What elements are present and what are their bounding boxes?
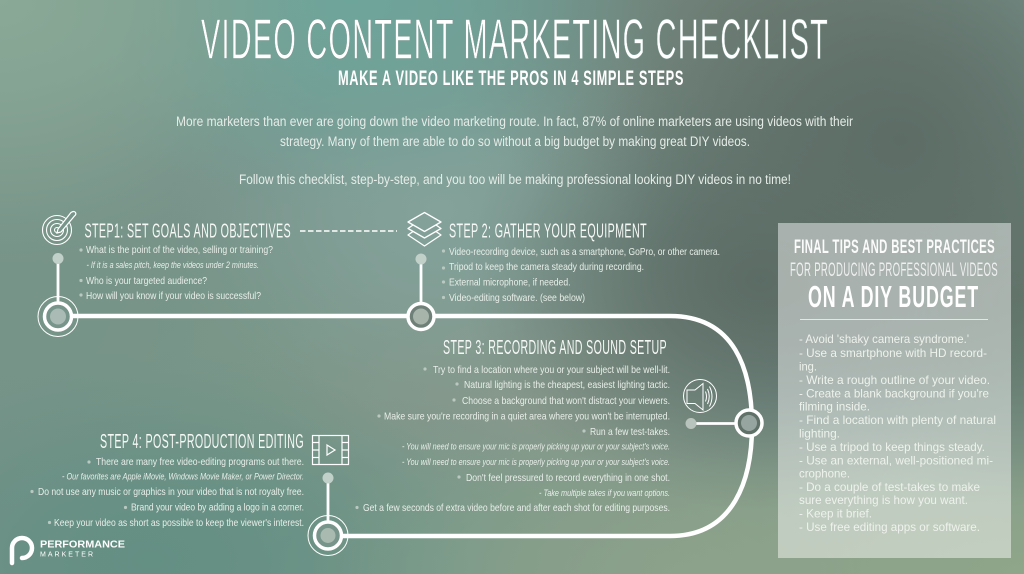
panel tips list: filming inside.: [799, 400, 870, 414]
intro text: Follow this checklist, step-by-step, and you too will be making professional looking DIY videos in no time!: [239, 172, 791, 187]
step 4 list: Do not use any music or graphics in your video that is not royalty free.: [38, 487, 304, 498]
step 1 list: [79, 245, 273, 302]
step 3 list: Try to find a location where you or your subject will be well-lit.: [433, 365, 670, 376]
intro text: strategy. Many of them are able to do so without a big budget by making great DIY videos.: [280, 134, 750, 149]
icon: target with pencil: [42, 212, 76, 244]
logo wordmark: [40, 538, 125, 558]
panel tips list: sure everything is how you want.: [799, 493, 968, 507]
panel tips list: - Do a couple of test-takes to make: [799, 480, 980, 494]
step 2 list: Video-recording device, such as a smartphone, GoPro, or other camera.: [449, 247, 720, 258]
panel tips list: crophone.: [799, 466, 850, 480]
step 1 list: What is the point of the video, selling or training?: [86, 245, 273, 256]
node: step 3: [686, 410, 762, 436]
intro text: More marketers than ever are going down the video marketing route. In fact, 87% of online marketers are using videos with their: [176, 114, 853, 129]
panel tips list: - Keep it brief.: [799, 506, 872, 520]
panel tips list: - Create a blank background if you're: [799, 386, 989, 400]
timeline path: [58, 231, 752, 536]
step 3 list: Choose a background that won't distract your viewers.: [462, 396, 670, 407]
step 2 heading: STEP 2: GATHER YOUR EQUIPMENT: [449, 220, 647, 242]
icon: layers: [408, 212, 441, 246]
panel tips list: [799, 332, 996, 534]
step 3 list: Natural lighting is the cheapest, easiest lighting tactic.: [464, 380, 670, 391]
panel tips list: - Use free editing apps or software.: [799, 520, 980, 534]
step 3 block: [355, 337, 670, 514]
step 3 list: - You will need to ensure your mic is properly picking up your or your subject's voice.: [402, 457, 670, 467]
logo wordmark: PERFORMANCE: [40, 538, 125, 550]
node: step 1: [38, 253, 78, 336]
step 1 heading: STEP1: SET GOALS AND OBJECTIVES: [84, 220, 291, 242]
icon: speaker: [684, 380, 716, 412]
step 4 list: [30, 457, 304, 529]
step 1 list: Who is your targeted audience?: [86, 276, 207, 287]
step 3 list: Get a few seconds of extra video before and after each shot for editing purposes.: [363, 503, 670, 514]
panel tips list: - Avoid 'shaky camera syndrome.': [799, 332, 969, 346]
logo mark: [12, 538, 32, 563]
panel tips list: - Use an external, well-positioned mi-: [799, 454, 993, 468]
logo: Performance Marketer: [12, 538, 125, 563]
node: step 2: [408, 254, 434, 330]
step 2 list: External microphone, if needed.: [449, 278, 570, 288]
step 3 list: - You will need to ensure your mic is properly picking up your or your subject's voice.: [402, 442, 670, 452]
step 4 block: [30, 431, 304, 529]
step 4 list: There are many free video-editing programs out there.: [96, 457, 304, 468]
panel tips list: - Use a tripod to keep things steady.: [799, 440, 985, 454]
panel tips list: - Write a rough outline of your video.: [799, 373, 990, 387]
intro text: [176, 114, 853, 187]
icon: film strip: [312, 436, 348, 464]
step 3 heading: STEP 3: RECORDING AND SOUND SETUP: [443, 337, 667, 359]
panel heading: [790, 236, 998, 314]
step 2 list: Tripod to keep the camera steady during recording.: [449, 262, 644, 273]
step 1 block: [79, 220, 291, 302]
step 1 list: How will you know if your video is successful?: [86, 291, 261, 302]
panel: final tips: [778, 223, 1011, 558]
step 3 list: Don't feel pressured to record everything in one shot.: [466, 473, 670, 484]
step 2 list: Video-editing software. (see below): [449, 293, 585, 304]
step 4 list: Brand your video by adding a logo in a corner.: [131, 502, 304, 514]
panel tips list: lighting.: [799, 426, 840, 440]
panel tips list: - Find a location with plenty of natural: [799, 413, 996, 427]
step 2 block: [442, 220, 720, 304]
step 3 list: Make sure you're recording in a quiet area where you won't be interrupted.: [384, 412, 670, 422]
step 4 list: Keep your video as short as possible to keep the viewer's interest.: [54, 518, 304, 529]
step 4 heading: STEP 4: POST-PRODUCTION EDITING: [100, 431, 304, 453]
panel tips list: - Use a smartphone with HD record-: [799, 346, 987, 360]
step 3 list: - Take multiple takes if you want options.: [539, 488, 670, 498]
step 3 list: [355, 365, 670, 514]
panel tips list: ing.: [799, 360, 817, 374]
logo wordmark: MARKETER: [40, 552, 93, 558]
node: step 4: [308, 472, 348, 556]
subtitle: MAKE A VIDEO LIKE THE PROS IN 4 SIMPLE STEPS: [338, 67, 684, 90]
step 1 list: - If it is a sales pitch, keep the videos under 2 minutes.: [86, 260, 259, 270]
step 4 list: - Our favorites are Apple iMovie, Windows Movie Maker, or Power Director.: [62, 472, 304, 482]
step 2 list: [442, 247, 720, 304]
step 3 list: Run a few test-takes.: [590, 427, 670, 438]
